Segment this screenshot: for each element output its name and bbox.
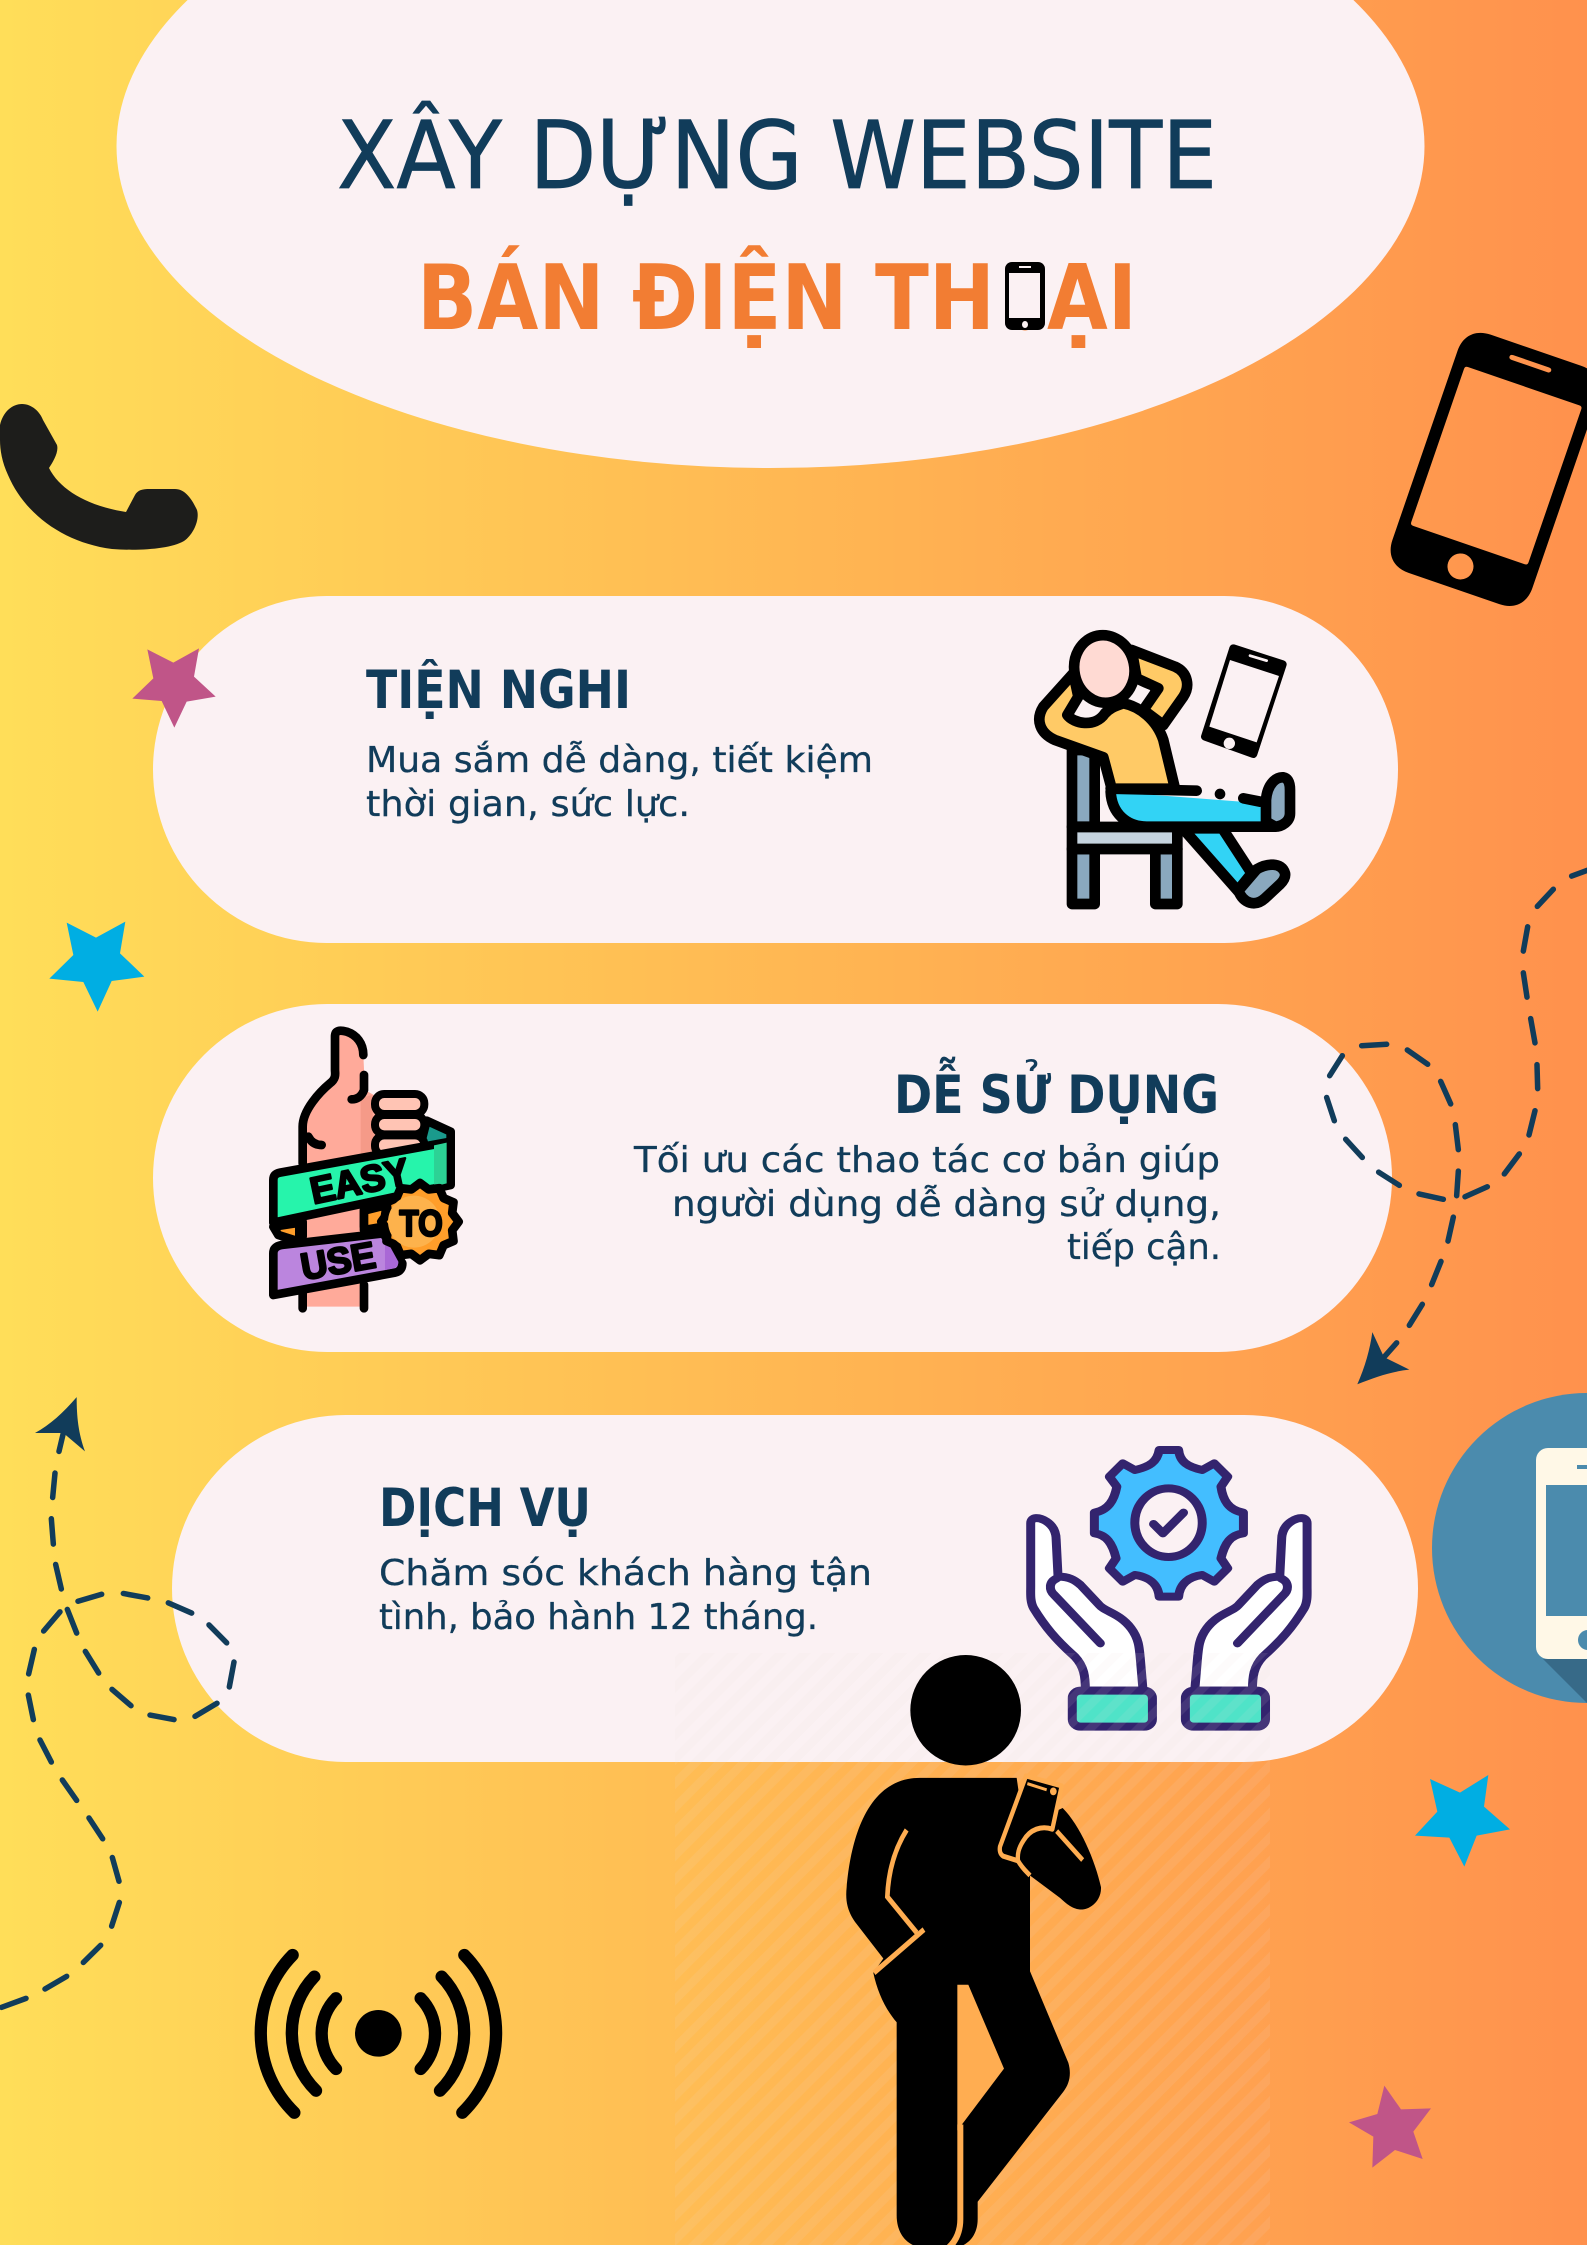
body text: dễ sử dụng: tiếp cận. bbox=[1067, 1227, 1221, 1268]
icon: easy to use thumbs up: TO bbox=[399, 1202, 443, 1244]
star: blue right bbox=[1415, 1775, 1510, 1867]
panel: dịch vụ bbox=[172, 1415, 1418, 1762]
body text: dễ sử dụng bbox=[633, 1140, 1221, 1268]
figure: person holding phone bbox=[846, 1655, 1101, 2245]
icon: hands holding gear bbox=[1031, 1450, 1307, 1727]
panel: tiện nghi bbox=[153, 596, 1398, 943]
icon: easy to use thumbs up: EASY bbox=[306, 1150, 413, 1212]
title ellipse bbox=[116, 0, 1424, 468]
body text: dịch vụ bbox=[379, 1553, 872, 1638]
title line 1: XÂY DỰNG WEBSITE bbox=[337, 100, 1217, 211]
title line 2: O bbox=[1007, 246, 1043, 351]
body text: tiện nghi: thời gian, sức lực. bbox=[366, 784, 690, 825]
icon: broadcast signal bbox=[261, 1955, 496, 2113]
icon: smartphone outline bbox=[1384, 326, 1587, 613]
body text: dễ sử dụng: người dùng dễ dàng sử dụng, bbox=[672, 1184, 1221, 1225]
dashed arrow: left bbox=[2, 1397, 234, 2007]
body text: dịch vụ: Chăm sóc khách hàng tận bbox=[379, 1553, 872, 1594]
title line 2: ẠI bbox=[1047, 246, 1137, 351]
star: pink bottom right bbox=[1349, 2086, 1431, 2168]
diagonal stripe texture bbox=[675, 1653, 1270, 2245]
body text: tiện nghi: Mua sắm dễ dàng, tiết kiệm bbox=[366, 740, 873, 781]
title line 2: BÁN ĐIỆN TH bbox=[417, 244, 995, 351]
icon: easy to use thumbs up: USE bbox=[297, 1233, 379, 1288]
star: pink top left bbox=[132, 648, 216, 728]
star: blue left bbox=[49, 922, 144, 1012]
icon: phone in blue circle bbox=[1432, 1393, 1587, 1703]
heading: tiện nghi: TIỆN NGHI bbox=[366, 658, 631, 721]
body text: dịch vụ: tình, bảo hành 12 tháng. bbox=[379, 1597, 818, 1638]
dashed arrow: right bbox=[1327, 870, 1587, 1384]
icon: telephone handset bbox=[0, 404, 198, 550]
heading: dễ sử dụng: DỄ SỬ DỤNG bbox=[894, 1056, 1219, 1126]
body text: dễ sử dụng: Tối ưu các thao tác cơ bản giúp bbox=[633, 1140, 1220, 1181]
heading: dịch vụ: DỊCH VỤ bbox=[379, 1478, 591, 1539]
panel: dễ sử dụng bbox=[153, 1004, 1392, 1352]
icon: relaxing person with phone bbox=[1039, 630, 1290, 904]
icon: easy to use thumbs up bbox=[273, 1031, 459, 1308]
body text: tiện nghi bbox=[366, 740, 873, 825]
